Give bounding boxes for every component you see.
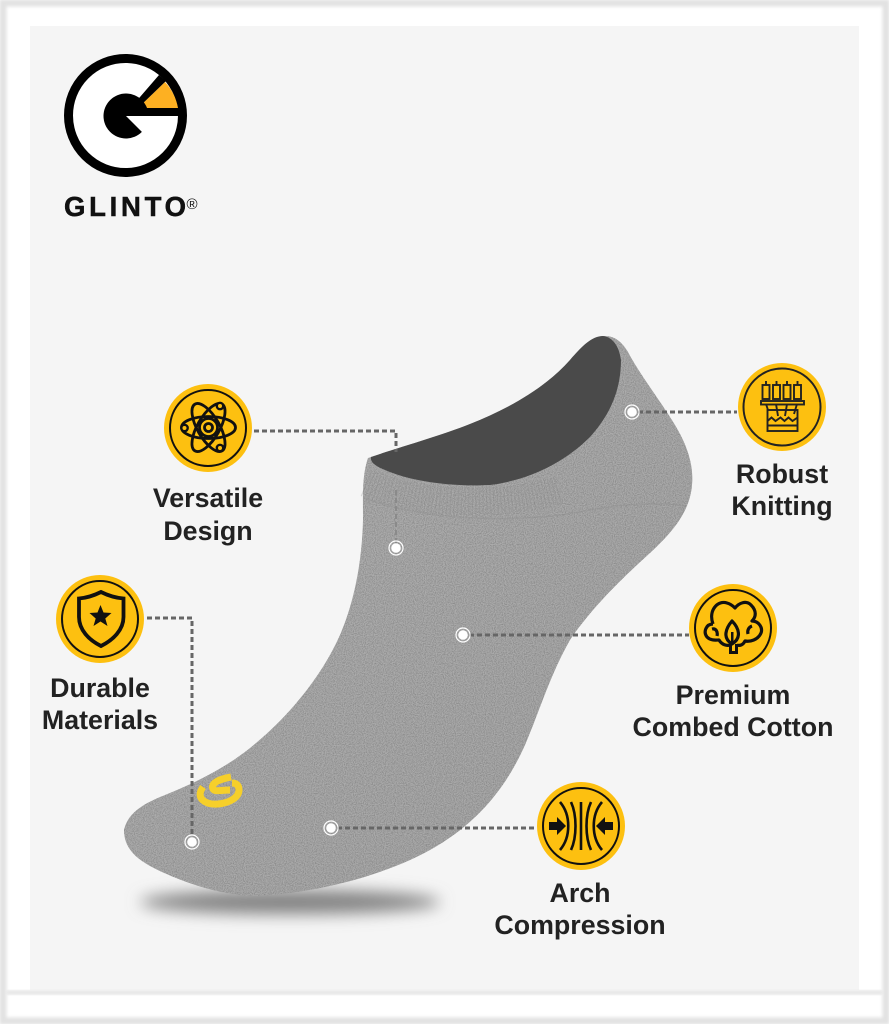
label: Materials (42, 705, 158, 735)
icon: cotton boll (689, 584, 777, 672)
leader line (147, 618, 192, 836)
icon: atom (164, 384, 252, 472)
sock cuff ribbing (366, 483, 560, 502)
marker (625, 405, 639, 419)
label: Versatile (153, 483, 263, 513)
sock cuff seam (364, 498, 686, 519)
marker (185, 835, 199, 849)
callout: premium combed cotton (456, 584, 833, 742)
callout: robust knitting (625, 363, 833, 521)
label: Design (163, 516, 253, 546)
leader line (638, 410, 737, 414)
knit texture (124, 336, 692, 896)
label: Durable (50, 673, 150, 703)
sock opening (371, 336, 621, 485)
label: Compression (494, 910, 666, 940)
logo mark (68, 58, 182, 172)
sock toe logo (200, 777, 239, 804)
callout: durable materials (42, 575, 199, 849)
label: Premium (676, 680, 790, 710)
sock shadow (140, 890, 440, 914)
marker (456, 628, 470, 642)
marker (389, 541, 403, 555)
callout: arch compression (324, 782, 666, 940)
label: Robust (736, 459, 828, 489)
leader line (254, 431, 396, 548)
sock illustration (124, 336, 692, 896)
icon: compression arrows (537, 782, 625, 870)
label: Arch (549, 878, 611, 908)
logo: Glinto (64, 58, 198, 222)
leader line (469, 634, 689, 636)
label: Combed Cotton (633, 712, 833, 742)
label: Knitting (731, 491, 833, 521)
icon: knitting machine (738, 363, 826, 451)
leader line (337, 826, 535, 830)
logo wordmark: GLINTO (64, 191, 186, 222)
callout: versatile design (153, 384, 403, 555)
sock body (124, 336, 692, 896)
icon: shield with star (56, 575, 144, 663)
marker (324, 821, 338, 835)
registered mark: ® (186, 196, 198, 213)
